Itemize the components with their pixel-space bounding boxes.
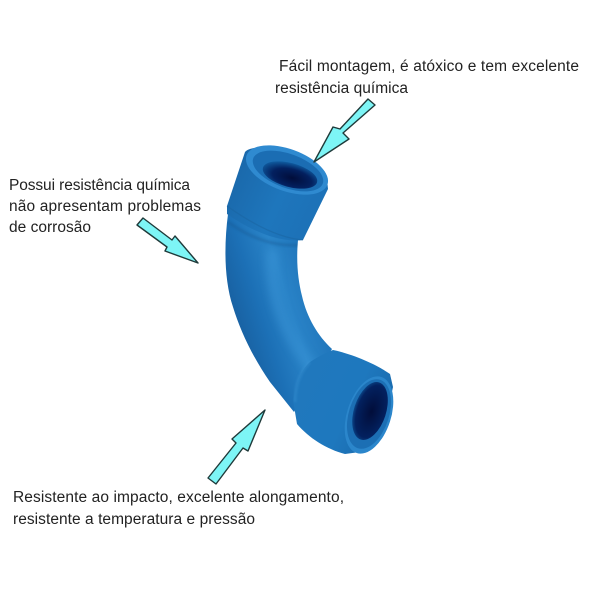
text block: top: Fácil montagem, é atóxico e tem excelente	[279, 58, 579, 75]
text block: top: resistência química	[275, 80, 408, 97]
arrow: left	[137, 218, 198, 263]
lower socket	[293, 350, 402, 460]
icon: blue PVC elbow pipe	[225, 136, 402, 460]
infographic canvas	[10, 60, 578, 528]
arrow: top	[314, 99, 375, 162]
arrow: bottom	[208, 410, 265, 484]
text block: top	[275, 58, 579, 97]
text block: left: de corrosão	[9, 219, 91, 236]
text block: bottom	[13, 489, 344, 528]
pipe body	[225, 214, 332, 412]
text block: bottom: resistente a temperatura e pressão	[13, 511, 255, 528]
text block: bottom: Resistente ao impacto, excelente alongamento,	[13, 489, 344, 506]
top socket	[227, 136, 335, 240]
text block: left: Possui resistência química	[9, 177, 190, 194]
text block: left	[9, 177, 201, 236]
text block: left: não apresentam problemas	[9, 198, 201, 215]
